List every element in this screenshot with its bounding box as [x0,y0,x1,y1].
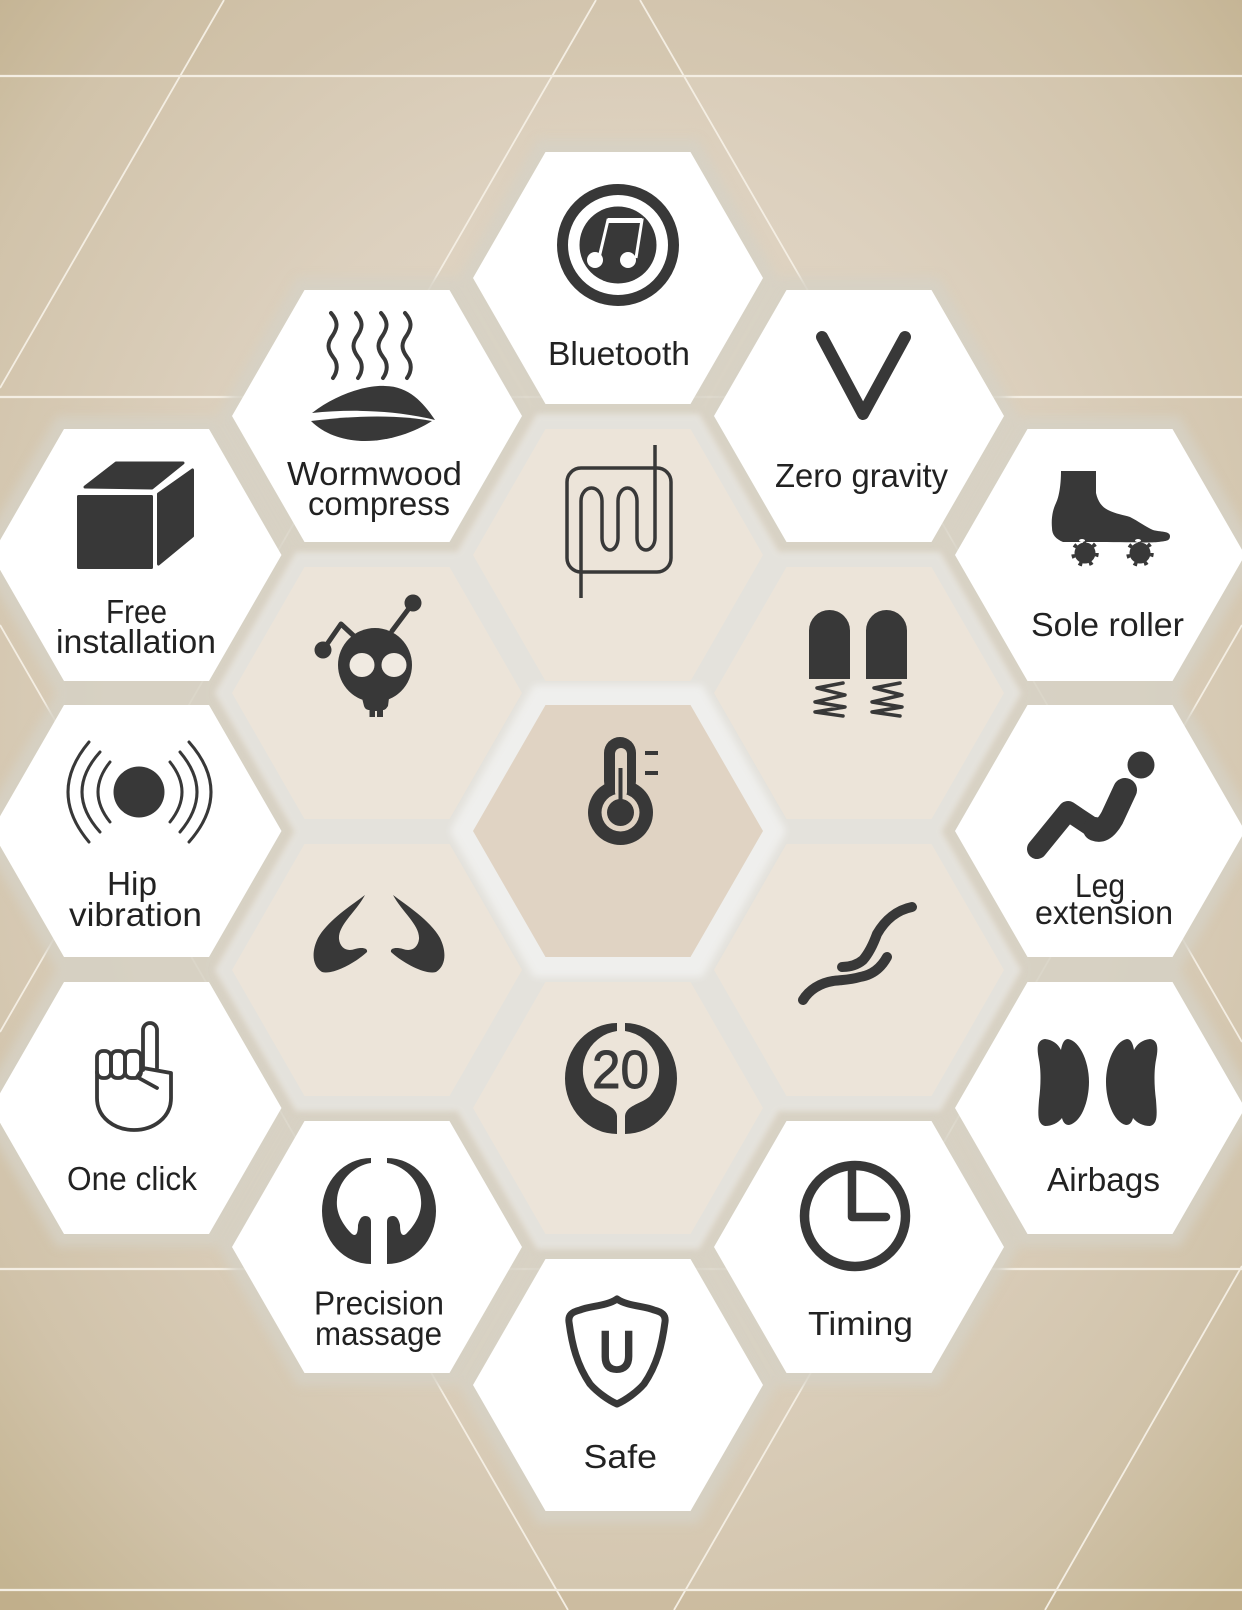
hexagon: Airbags [955,982,1242,1234]
hexagon: Precision massage [232,1121,522,1373]
label: Hip vibration: vibration [69,896,202,933]
icon: curved pads [314,895,444,972]
hexagon: Hip vibration [0,705,282,957]
icon: clock [804,1166,906,1266]
hexagon: spring rollers [714,567,1004,819]
icon: hands around 20: 20 [592,1040,649,1100]
label: One click: One click [67,1160,197,1197]
label: Free installation: installation [56,623,216,660]
label: Precision massage [314,1284,444,1352]
hexagon: Sole roller [955,429,1242,681]
label: Safe: Safe [584,1438,657,1475]
label: Free installation: Free [106,593,167,630]
label: Free installation [56,593,216,660]
hexagon: One click [0,982,282,1234]
label: Wormwood compress: compress [308,485,450,522]
label: Precision massage: massage [315,1315,442,1352]
hexagon: Free installation [0,429,282,681]
icon: flowing arm curves [803,907,912,1000]
label: Leg extension [1035,867,1173,931]
icon: music note disc [562,190,674,300]
hexagon: Bluetooth [473,152,763,404]
icon: cube [78,463,192,568]
label: Airbags: Airbags [1047,1161,1160,1198]
label: Zero gravity: Zero gravity [775,457,948,494]
label: Wormwood compress [287,455,462,522]
label: Wormwood compress: Wormwood [287,455,462,492]
icon: capsules on springs [809,610,907,716]
icon: hands around 20 [565,1023,677,1134]
icon: reclining figure [1037,752,1154,849]
label: Hip vibration: Hip [107,865,157,902]
hexagon: Zero gravity [714,290,1004,542]
icon: heating coil [567,445,671,598]
label: Leg extension: Leg [1075,867,1125,904]
label: Hip vibration [69,865,202,933]
icon: foot on rollers [1052,471,1170,565]
icon: vibration waves [68,742,211,842]
icon: pointing hand [97,1023,171,1130]
label: Timing: Timing [808,1305,913,1342]
label: Bluetooth: Bluetooth [548,335,690,372]
icon: airbags [1038,1039,1157,1126]
icon: V zero gravity [822,337,905,414]
hexagon: Wormwood compress [232,290,522,542]
hexagon: Timing [714,1121,1004,1373]
hexagon: arm massage [714,844,1004,1096]
hexagon: heating element [473,429,763,681]
icon: shield with U [569,1299,665,1404]
hexagon: robot massage head [232,567,522,819]
icon: cupped hands [322,1158,436,1264]
hexagon: Leg extension [955,705,1242,957]
icon: shield with U: U [598,1318,636,1386]
label: Precision massage: Precision [314,1284,444,1322]
label: Leg extension: extension [1035,894,1173,931]
hexagon: 20 programs [473,982,763,1234]
label: Sole roller: Sole roller [1031,606,1184,643]
hexagon: side airbags [232,844,522,1096]
icon: steaming leaf [311,313,435,441]
icon: skull robot [314,594,422,717]
hexagon: temperature centre [473,705,763,957]
icon: thermometer [588,737,658,845]
hexagon: Safe [473,1259,763,1511]
